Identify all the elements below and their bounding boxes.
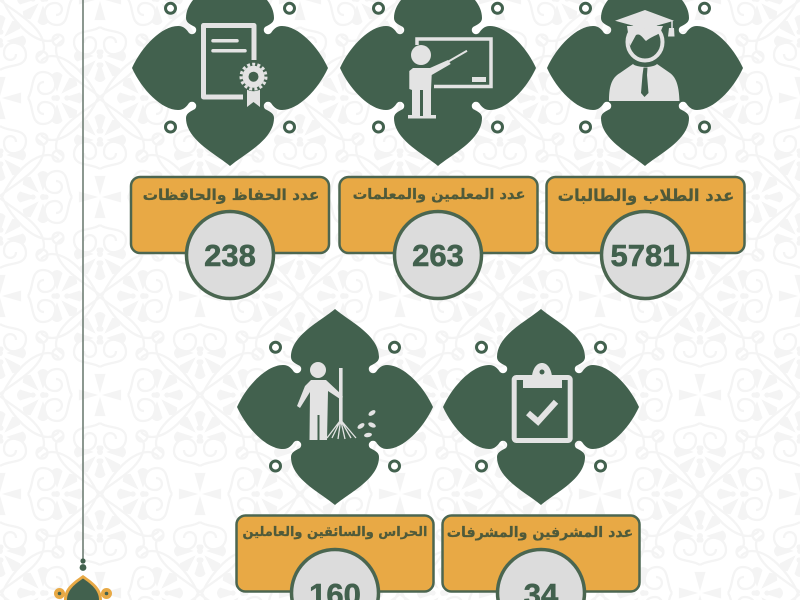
label: students: عدد الطلاب والطالبات [558, 186, 734, 206]
card: supervisors [442, 516, 640, 592]
number: memorizers: 238 [204, 238, 256, 273]
label: teachers: عدد المعلمين والمعلمات [353, 186, 525, 203]
card: teachers [340, 177, 538, 253]
number disc: memorizers [186, 212, 274, 298]
number: students: 5781 [611, 238, 679, 273]
label: guards and workers: الحراس والسائقين والعاملين [242, 525, 428, 540]
icon: graduate [609, 10, 680, 101]
card: students [546, 177, 744, 253]
panel: teachers [340, 0, 538, 298]
flower: memorizers [132, 0, 328, 166]
number disc: guards and workers [292, 550, 378, 600]
card: memorizers [131, 177, 329, 253]
panel: supervisors [442, 309, 640, 600]
label: supervisors: عدد المشرفين والمشرفات [447, 525, 633, 541]
icon: clipboard [514, 363, 570, 440]
timeline ornament [54, 558, 112, 600]
flower: students [547, 0, 743, 166]
flower: supervisors [443, 309, 639, 505]
vertical timeline line [82, 0, 84, 559]
panel: memorizers [131, 0, 329, 298]
icon: certificate [204, 26, 268, 107]
number: teachers: 263 [412, 238, 464, 273]
flower: guards and workers [237, 309, 433, 505]
icon: teacher at board [408, 39, 491, 118]
number disc: supervisors [498, 550, 584, 600]
panel: guards and workers [236, 309, 434, 600]
icon: sweeper [297, 362, 377, 440]
number disc: students [602, 212, 688, 298]
number disc: teachers [394, 212, 482, 298]
panel: students [546, 0, 744, 298]
flower: teachers [340, 0, 536, 166]
card: guards and workers [236, 516, 434, 592]
label: memorizers: عدد الحفاظ والحافظات [143, 186, 319, 204]
